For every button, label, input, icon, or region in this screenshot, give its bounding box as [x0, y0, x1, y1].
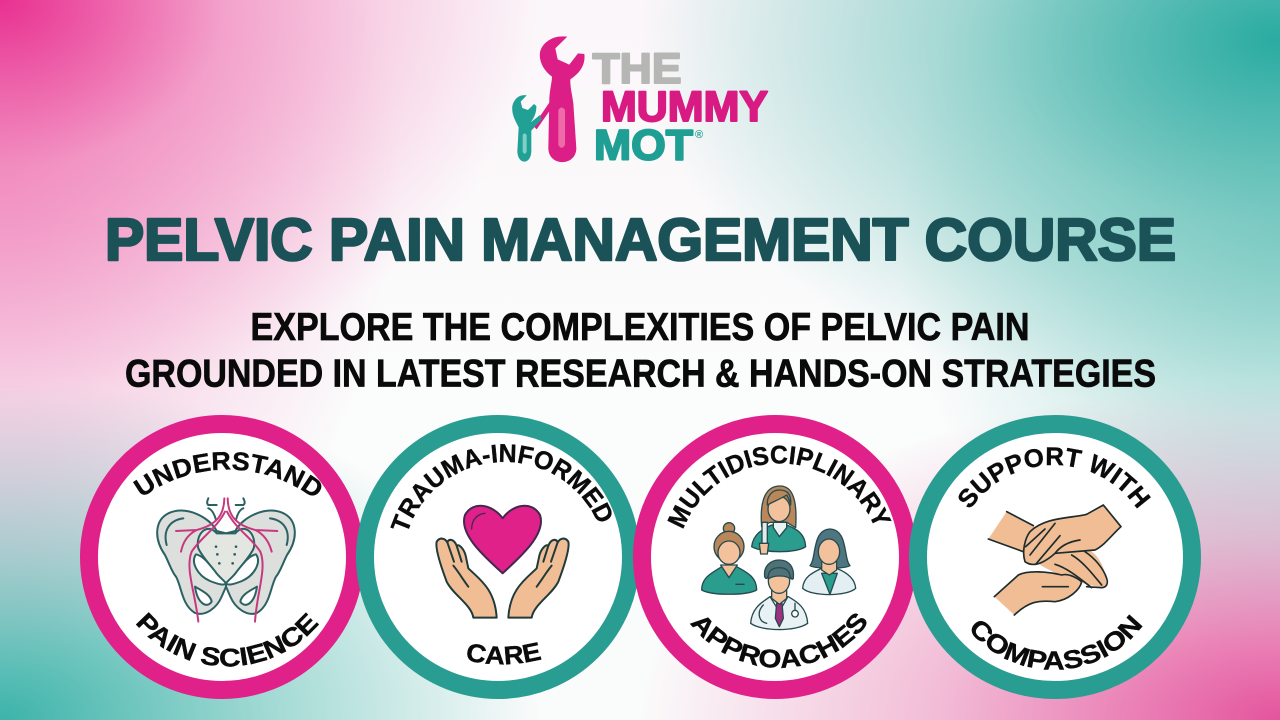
- ring: [642, 424, 908, 690]
- icon: large pink wrench: [533, 36, 585, 162]
- subtitle: [125, 306, 1156, 396]
- badge: understand pain science: [80, 415, 360, 699]
- title: PELVIC PAIN MANAGEMENT COURSE: [105, 207, 1176, 273]
- logo word: MUMMY: MUMMY: [601, 83, 768, 131]
- label: SUPPORT WITH: SUPPORT WITH: [958, 447, 1151, 508]
- badge: support with compassion: [909, 415, 1201, 699]
- icon: pelvis with nerves: [157, 498, 295, 622]
- label: UNDERSTAND: UNDERSTAND: [133, 452, 322, 496]
- person: top woman: [752, 486, 806, 554]
- logo word: MOT: MOT: [594, 122, 693, 170]
- lower back hand: [988, 512, 1107, 588]
- icon: clasped hands: [988, 505, 1121, 615]
- person: right woman: [803, 529, 856, 595]
- ring: [89, 424, 355, 690]
- icon: care team: [702, 486, 856, 630]
- subtitle line 2: GROUNDED IN LATEST RESEARCH & HANDS-ON STRATEGIES: [125, 352, 1156, 396]
- person: left nurse: [702, 523, 757, 594]
- label: TRAUMA-INFORMED: TRAUMA-INFORMED: [390, 444, 612, 529]
- left hand: [436, 539, 497, 618]
- heart: [464, 506, 541, 573]
- badge: multidisciplinary approaches: [633, 415, 913, 699]
- top hand: [1024, 505, 1121, 564]
- bottom hand: [994, 572, 1082, 615]
- registered mark: ®: [695, 129, 703, 141]
- person: bottom doctor: [751, 560, 808, 630]
- ring: [918, 424, 1192, 690]
- subtitle line 1: EXPLORE THE COMPLEXITIES OF PELVIC PAIN: [250, 306, 1030, 349]
- label: CARE: CARE: [467, 642, 542, 665]
- label: PAIN SCIENCE: PAIN SCIENCE: [136, 612, 319, 667]
- label: APPROACHES: APPROACHES: [690, 614, 866, 668]
- logo: The Mummy MOT: [512, 36, 768, 170]
- right hand: [508, 539, 569, 618]
- ring: [365, 424, 631, 690]
- label: MULTIDISCIPLINARY: MULTIDISCIPLINARY: [667, 445, 892, 529]
- badge: trauma-informed care: [356, 415, 636, 699]
- icon: hands holding heart: [436, 506, 569, 618]
- logo word: THE: THE: [592, 45, 682, 93]
- icon: small teal wrench: [512, 95, 542, 162]
- label: COMPASSION: COMPASSION: [972, 614, 1143, 670]
